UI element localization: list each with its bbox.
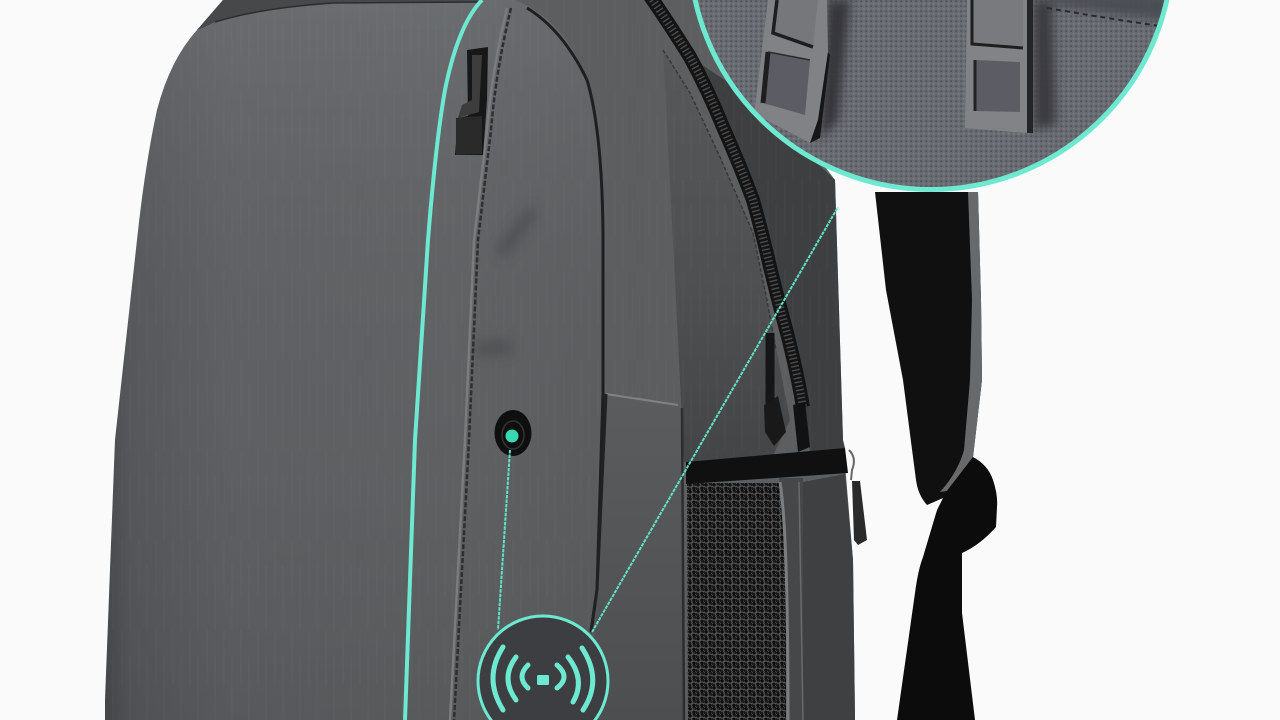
right buckle [965, 0, 1033, 133]
backpack side panel [515, 0, 855, 720]
side seam stitching [663, 50, 776, 350]
side zipper tab [849, 450, 867, 545]
shadows behind buckles [820, 0, 1170, 140]
wireless icon badge [478, 616, 608, 720]
flap shading marks [476, 205, 538, 356]
main zipper [650, 0, 810, 452]
seam stitching [1047, 8, 1160, 26]
dotted connector: button to wireless icon [498, 450, 510, 630]
flap seam arc [527, 8, 603, 632]
zoom lens: fabric and buckle detail [690, 0, 1172, 190]
left buckle [755, 0, 830, 143]
dotted connector: icon to zoom lens [592, 207, 838, 632]
wireless port button [494, 410, 532, 456]
teal vertical accent line [405, 0, 482, 720]
side pocket flap [590, 394, 684, 720]
flap stitching [450, 8, 511, 720]
side mesh pocket [686, 448, 855, 720]
shoulder strap [875, 192, 997, 720]
top zipper pull [455, 47, 488, 155]
backpack front panel [105, 0, 603, 720]
